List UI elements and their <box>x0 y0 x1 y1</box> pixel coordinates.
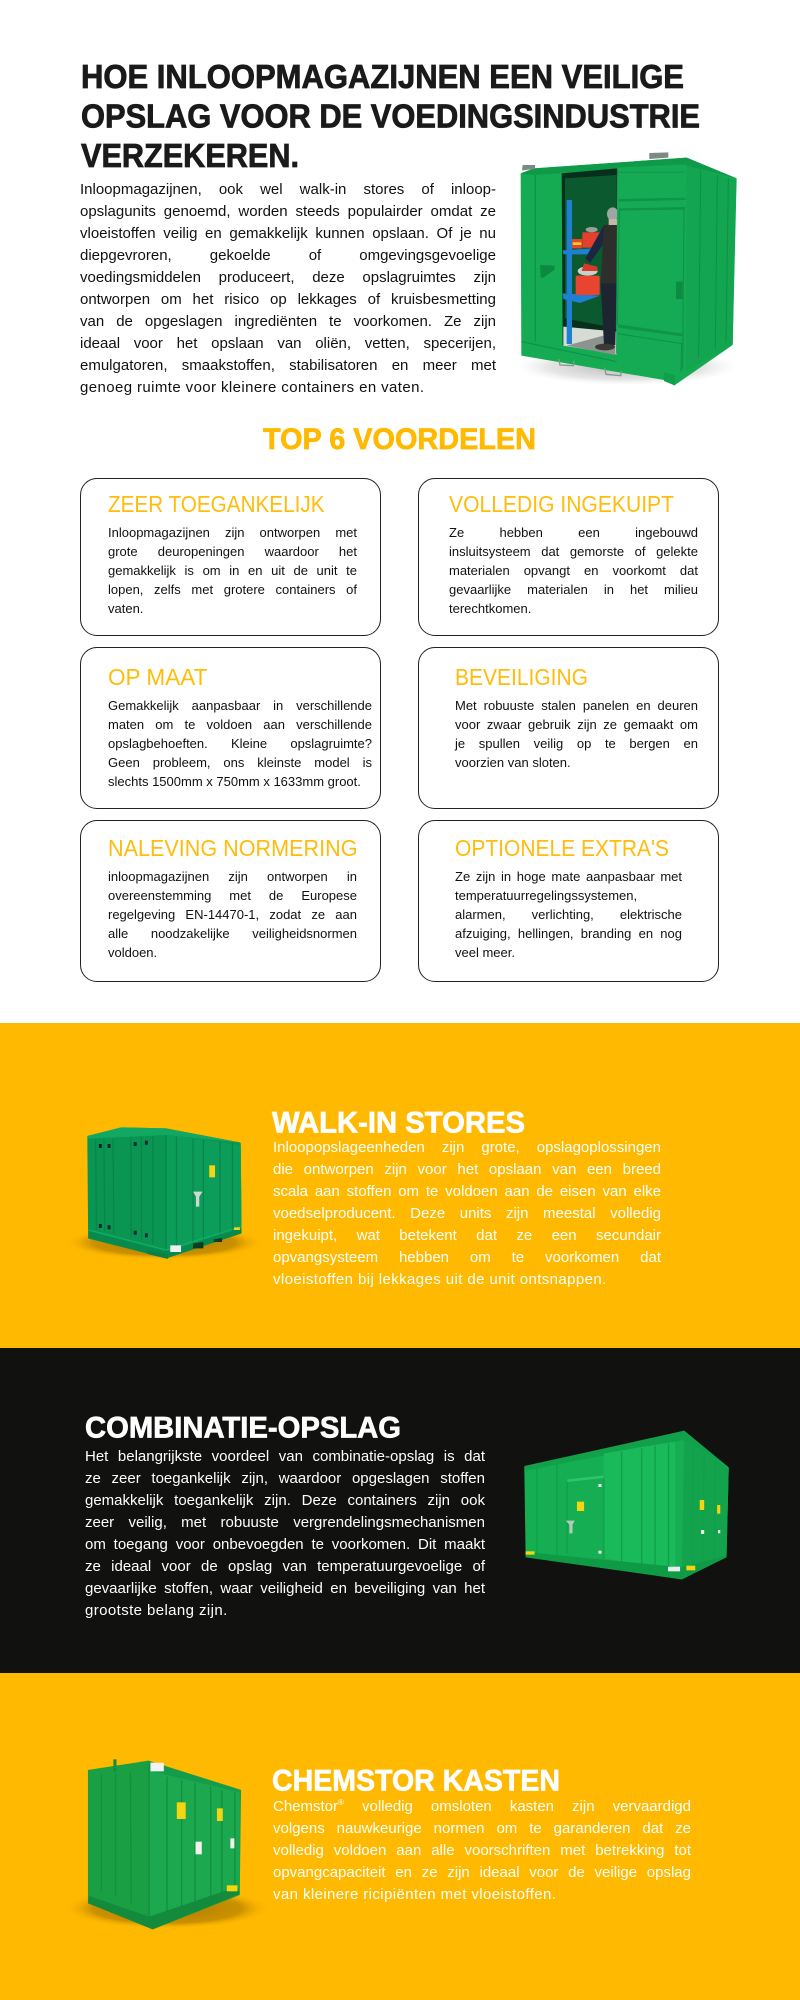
card text: naleving normering <box>108 869 357 960</box>
text: chemstor kasten: volgens nauwkeurige normen om te garanderen dat ze <box>273 1820 691 1837</box>
text: walk-in stores <box>273 1139 661 1288</box>
card text: naleving normering: regelgeving EN-14470-1, zodat ze aan <box>108 907 357 922</box>
card text: beveiliging: Met robuuste stalen panelen en deuren <box>455 698 698 713</box>
card text: volledig ingekuipt: terechtkomen. <box>449 601 531 616</box>
card text: naleving normering: voldoen. <box>108 945 157 960</box>
text: walk-in stores: ingekuipt, wat betekent dat ze een secundair <box>273 1227 661 1244</box>
text: walk-in stores: Inloopopslageenheden zijn grote, opslagoplossingen <box>273 1139 661 1156</box>
heading: chemstor kasten: CHEMSTOR KASTEN <box>272 1765 560 1798</box>
text: walk-in stores: opvangsysteem hebben om te voorkomen dat <box>273 1249 661 1266</box>
panel: chemstor kasten <box>0 1673 800 2000</box>
text: combinatie-opslag: om toegang voor onbevoegden te voorkomen. Dit maakt <box>85 1536 485 1553</box>
intro text: emulgatoren, smaakstoffen, stabilisatoren en meer met <box>80 357 496 374</box>
title: OPSLAG VOOR DE VOEDINGSINDUSTRIE <box>81 98 700 134</box>
text: walk-in stores: scala aan stoffen om te voldoen aan de eisen van elke <box>273 1183 661 1200</box>
intro text: Inloopmagazijnen, ook wel walk-in stores of inloop- <box>80 181 496 198</box>
card text: beveiliging: voor zwaar gebruik zijn ze gemaakt om <box>455 717 698 732</box>
card text: op maat: slechts 1500mm x 750mm x 1633mm groot. <box>108 774 361 789</box>
intro text: ideaal voor het opslaan van oliën, vetten, specerijen, <box>80 335 496 352</box>
card text: zeer toegankelijk: grote deuropeningen waardoor het <box>108 544 357 559</box>
panel: combinatie-opslag <box>0 1348 800 1673</box>
intro text: ontworpen om het risico op lekkages of kruisbesmetting <box>80 291 496 308</box>
card text: zeer toegankelijk: gemakkelijk is om in en uit de unit te <box>108 563 357 578</box>
panel: naleving normering <box>80 820 381 982</box>
text: combinatie-opslag: zeer veilig, met robuuste vergrendelingsmechanismen <box>85 1514 485 1531</box>
intro text: genoeg ruimte voor kleinere containers en vaten. <box>80 379 424 396</box>
card text: optionele extra's: alarmen, verlichting, elektrische <box>455 907 682 922</box>
card text: beveiliging <box>454 698 698 770</box>
panel: volledig ingekuipt <box>418 478 719 636</box>
card text: volledig ingekuipt: materialen opvangt en voorkomt dat <box>449 563 698 578</box>
card text: zeer toegankelijk: Inloopmagazijnen zijn ontworpen met <box>108 525 357 540</box>
card text: beveiliging: voorzien van sloten. <box>455 755 571 770</box>
card text: naleving normering: overeenstemming met de Europese <box>108 888 357 903</box>
card heading: naleving normering: NALEVING NORMERING <box>108 835 358 861</box>
text: combinatie-opslag: ze ideaal voor de opslag van temperatuurgevoelige of <box>85 1558 485 1575</box>
card text: optionele extra's: Ze zijn in hoge mate aanpasbaar met <box>455 869 682 884</box>
intro text: van de opgeslagen ingrediënten te voorkomen. Ze zijn <box>80 313 496 330</box>
card text: op maat: Gemakkelijk aanpasbaar in verschillende <box>108 698 372 713</box>
panel: optionele extra's <box>418 820 719 982</box>
text: combinatie-opslag <box>85 1448 486 1619</box>
card text: naleving normering: alle noodzakelijke veiligheidsnormen <box>108 926 357 941</box>
intro text: voedingsmiddelen produceert, deze opslagruimtes zijn <box>80 269 496 286</box>
text: combinatie-opslag: grootste belang zijn. <box>85 1602 228 1619</box>
card text: beveiliging: je spullen veilig op te bergen en <box>455 736 698 751</box>
card text: volledig ingekuipt: Ze hebben een ingebouwd <box>449 525 698 540</box>
text: combinatie-opslag: ze zeer toegankelijk zijn, waardoor opgeslagen stoffen <box>85 1470 485 1487</box>
card text: zeer toegankelijk: vaten. <box>108 601 143 616</box>
card text: volledig ingekuipt: gevaarlijke materialen in het milieu <box>449 582 698 597</box>
intro text: opslagunits genoemd, worden steeds populairder omdat ze <box>80 203 496 220</box>
card text: op maat <box>108 698 372 789</box>
intro text <box>80 181 496 396</box>
card heading: op maat: OP MAAT <box>108 664 207 690</box>
text: chemstor kasten <box>273 1798 691 1903</box>
card text: zeer toegankelijk: lopen, zelfs met grotere containers of <box>108 582 357 597</box>
text: walk-in stores: voedselproducent. Deze units zijn meestal volledig <box>273 1205 661 1222</box>
card text: volledig ingekuipt <box>449 525 698 616</box>
card text: op maat: opslagbehoeften. Kleine opslagruimte? <box>108 736 372 751</box>
image: open walk-in store with worker <box>520 152 737 386</box>
card heading: volledig ingekuipt: VOLLEDIG INGEKUIPT <box>449 491 674 517</box>
panel: walk-in stores <box>0 1023 800 1348</box>
panel: beveiliging <box>418 647 719 809</box>
intro text: vloeistoffen veilig en gemakkelijk kunnen opslaan. Of je nu <box>80 225 496 242</box>
text: chemstor kasten: opvangcapaciteit en ze zijn ideaal voor de veilige opslag <box>273 1864 691 1881</box>
text: combinatie-opslag: Het belangrijkste voordeel van combinatie-opslag is dat <box>85 1448 485 1465</box>
title: VERZEKEREN. <box>81 137 299 174</box>
heading: top 6 voordelen: TOP 6 VOORDELEN <box>263 423 536 456</box>
card text: optionele extra's: temperatuurregelingssystemen, <box>455 888 637 903</box>
image: combination storage container <box>524 1430 729 1580</box>
heading: walk-in stores: WALK-IN STORES <box>272 1107 525 1140</box>
card text: optionele extra's <box>455 869 682 960</box>
panel: zeer toegankelijk <box>80 478 381 636</box>
card heading: optionele extra's: OPTIONELE EXTRA'S <box>455 835 669 861</box>
title: HOE INLOOPMAGAZIJNEN EEN VEILIGE <box>81 58 684 95</box>
text: walk-in stores: vloeistoffen bij lekkages uit de unit ontsnappen. <box>273 1271 607 1288</box>
text: chemstor kasten: volledig voldoen aan alle voorschriften met betrekking tot <box>273 1842 691 1859</box>
panel: op maat <box>80 647 381 809</box>
text: combinatie-opslag: gevaarlijke stoffen, waar veiligheid en beveiliging van het <box>85 1580 485 1597</box>
card text: optionele extra's: veel meer. <box>455 945 515 960</box>
text: chemstor kasten: van kleinere ricipiënten met vloeistoffen. <box>273 1886 556 1903</box>
image: walk-in store container <box>76 1127 252 1259</box>
card text: optionele extra's: afzuiging, hellingen, branding en nog <box>455 926 682 941</box>
text: combinatie-opslag: gemakkelijk toegankelijk zijn. Deze containers zijn ook <box>85 1492 485 1509</box>
card text: op maat: Geen probleem, ons kleinste model is <box>108 755 372 770</box>
card heading: beveiliging: BEVEILIGING <box>455 664 588 690</box>
card text: zeer toegankelijk <box>108 525 357 616</box>
card text: op maat: maten om te voldoen aan verschillende <box>108 717 372 732</box>
text: chemstor kasten: Chemstor® volledig omsloten kasten zijn vervaardigd <box>273 1798 691 1815</box>
intro text: diepgevroren, gekoelde of omgevingsgevoelige <box>80 247 496 264</box>
card text: volledig ingekuipt: insluitsysteem dat gemorste of gelekte <box>449 544 698 559</box>
heading: combinatie-opslag: COMBINATIE-OPSLAG <box>85 1412 401 1445</box>
card heading: zeer toegankelijk: ZEER TOEGANKELIJK <box>108 491 325 517</box>
title <box>80 58 700 174</box>
card text: naleving normering: inloopmagazijnen zijn ontworpen in <box>108 869 357 884</box>
image: chemstor cabinet <box>75 1759 259 1930</box>
text: walk-in stores: die ontworpen zijn voor het opslaan van een breed <box>273 1161 661 1178</box>
